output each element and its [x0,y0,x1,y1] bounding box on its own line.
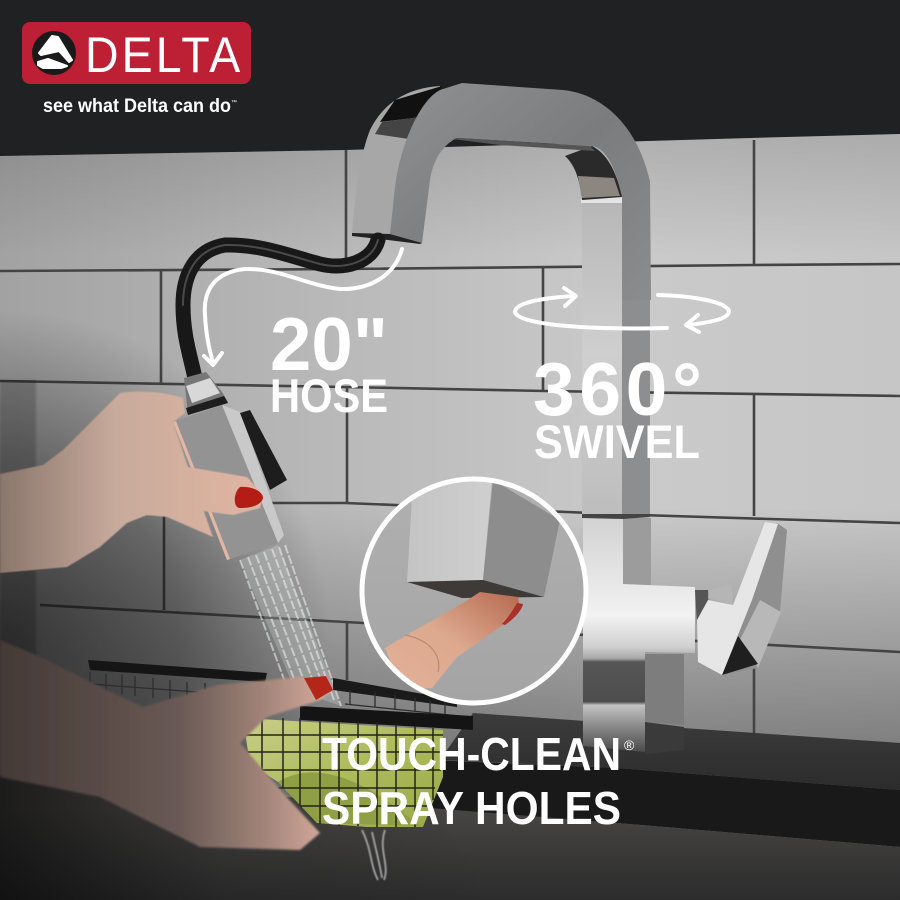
label: Touch-Clean spray holes: SPRAY HOLES [322,782,621,834]
tagline: see what Delta can do [43,96,231,117]
finger [385,592,523,690]
label: Touch-Clean spray holes: ® [624,737,635,753]
label: Touch-Clean spray holes: TOUCH-CLEAN [322,728,621,780]
faucet body [582,514,695,754]
faucet [352,83,787,754]
arrow: swivel rotation [515,288,729,332]
thumb with red nail [125,467,263,515]
logo emblem [32,31,76,75]
red fingernail [235,487,263,508]
wire basket with greens [88,660,473,827]
label: 20 inch hose [270,302,388,422]
water drip [362,830,386,880]
Delta logo: ™ [231,99,237,106]
label: Touch-Clean spray holes [322,728,635,834]
Delta logo [22,22,251,117]
lower hand with red nail [0,640,333,850]
inset: spray holes close-up [362,479,586,703]
upper hand back [0,392,213,573]
dark upper cabinet band [0,0,900,156]
faucet column [581,180,650,516]
pull-down sprayer [173,372,287,560]
red fingernail [304,676,333,700]
sprayer cube [407,480,560,598]
label: 20 inch hose: HOSE [270,369,388,422]
logo wordmark: DELTA [85,27,241,83]
arrow: hose length [204,249,402,365]
label: 360 swivel: 360° [533,347,702,431]
label: 360 swivel: SWIVEL [534,415,700,468]
countertop and sink [0,713,900,900]
label: 360 swivel [533,347,702,468]
hose [183,240,378,378]
faucet handle [695,522,787,675]
faucet spout [352,83,651,300]
label: 20 inch hose: 20" [270,302,388,386]
water spray [240,545,341,706]
dark wall shading lower left [0,150,340,900]
